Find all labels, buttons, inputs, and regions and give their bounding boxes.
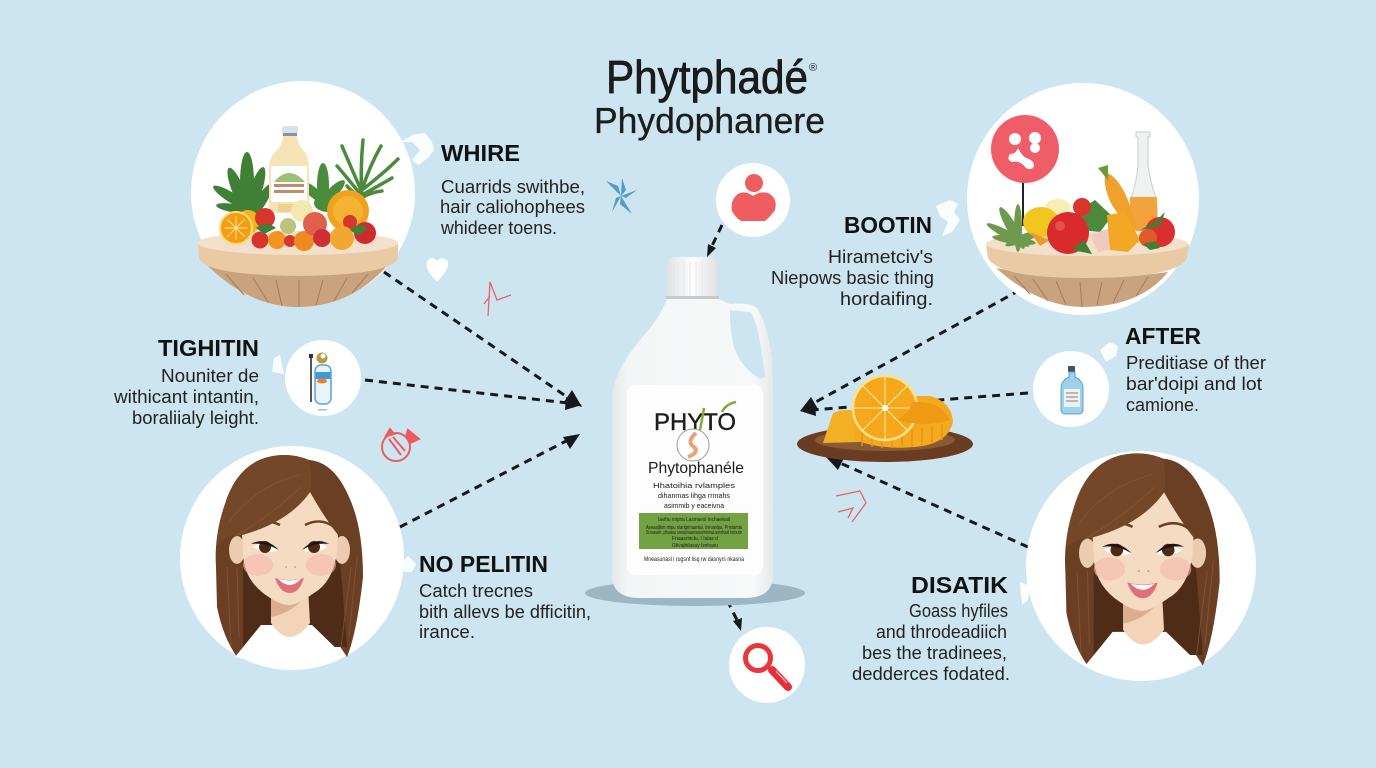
arrow: top-left bowl to bottle xyxy=(384,272,582,407)
text block: TIGHITIN: boraliialy leight. xyxy=(132,407,259,428)
text block: AFTER: Preditiase of ther xyxy=(1126,352,1266,373)
text block: TIGHITIN: Nouniter de xyxy=(161,365,259,386)
text block: BOOTIN: Niepows basic thing xyxy=(771,267,934,288)
text block: DISATIK: Goass hyfiles xyxy=(909,600,1008,621)
panel: left woman xyxy=(180,446,404,670)
bottle label xyxy=(627,385,763,575)
text block: BOOTIN: hordaifing. xyxy=(840,288,933,309)
text block: DISATIK: bes the tradinees, xyxy=(862,642,1007,663)
text block: BOOTIN: BOOTIN xyxy=(844,212,932,238)
text block: WHIRE xyxy=(440,140,585,238)
icon: orange slices on plate xyxy=(797,376,973,462)
panel: top-left food bowl xyxy=(191,81,415,307)
icon: blue pinwheel star xyxy=(606,178,637,214)
label small text xyxy=(653,481,735,510)
icon: red squiggle left xyxy=(484,282,511,316)
icon: carrot xyxy=(1098,165,1137,228)
icon: wooden bowl xyxy=(986,232,1189,307)
text block: DISATIK xyxy=(852,572,1010,684)
text block: WHIRE: whideer toens. xyxy=(440,217,557,238)
text block: DISATIK: DISATIK xyxy=(911,572,1008,598)
arrow: woman to bottle xyxy=(400,434,580,527)
icon: red pomegranate outline xyxy=(382,429,419,461)
text block: WHIRE: WHIRE xyxy=(441,140,520,166)
arrow: bottle to magnifier xyxy=(727,600,742,631)
icon: woman portrait xyxy=(1065,453,1220,673)
text block: NO PELITIN: NO PELITIN xyxy=(419,551,548,577)
panel: small bottle right xyxy=(1033,351,1109,427)
title: Phydophanere xyxy=(594,100,825,141)
text block: BOOTIN: Hirametciv's xyxy=(828,246,933,267)
label small text: asimmib y eaceivna xyxy=(664,501,725,510)
icon: palm plant xyxy=(337,140,398,203)
label small text: Hhatoihia rvlamples xyxy=(653,481,735,490)
bottle shadow xyxy=(585,580,805,606)
text block: TIGHITIN: TIGHITIN xyxy=(158,335,259,361)
label emblem xyxy=(677,429,709,461)
icon: glass bottle xyxy=(1130,132,1157,232)
label green band: Gtivajhilasuy lsnhasu xyxy=(672,543,718,549)
text block: WHIRE: Cuarrids swithbe, xyxy=(441,176,585,197)
arrow: heart icon to bottle xyxy=(707,225,722,257)
icon: person heart xyxy=(732,174,776,221)
text block: TIGHITIN: withicant intantin, xyxy=(113,386,259,407)
icon: red arrows right xyxy=(836,491,866,522)
panel: heart person icon xyxy=(716,163,790,237)
text block: WHIRE: hair caliohophees xyxy=(440,196,585,217)
text block: NO PELITIN: bith allevs be dfficitin, xyxy=(419,601,591,622)
arrow: top-right bowl to centre xyxy=(800,290,1020,411)
label green band: Aseaaljhm mipu nlarlgrinaanlai, Ininswlpa, Pristamla xyxy=(646,525,742,531)
label brand: PHYTO xyxy=(654,409,736,436)
label green band: Iavihu mipna Lasmaesl Inchaeivail xyxy=(658,517,730,523)
icon: water bottle and strap xyxy=(309,352,331,410)
text block: NO PELITIN: Catch trecnes xyxy=(419,580,533,601)
text block: AFTER: AFTER xyxy=(1125,323,1201,349)
title: Phytphadé xyxy=(606,51,808,103)
label green band xyxy=(639,513,748,549)
panel: magnifier icon xyxy=(729,627,805,703)
icon: white heart xyxy=(427,258,448,282)
label small text: dihanmas lihga rrmahs xyxy=(658,491,730,500)
icon: woman portrait xyxy=(216,455,363,664)
label sprout xyxy=(700,402,736,430)
panel: top-right food bowl xyxy=(967,83,1199,315)
icon: oil bottle xyxy=(269,126,309,213)
label name: Phytophanéle xyxy=(648,460,744,477)
text block: AFTER: bar'doipi and lot xyxy=(1126,373,1262,394)
bottle handle opening xyxy=(730,310,765,379)
arrow: small bottle to bottle xyxy=(365,380,582,410)
arrow: after bottle to centre xyxy=(800,393,1028,416)
icon: red pin badge xyxy=(991,115,1059,226)
title: ® xyxy=(809,62,817,74)
text block: TIGHITIN xyxy=(113,335,259,428)
product bottle xyxy=(612,257,773,598)
icon: left herb leaves xyxy=(211,152,275,218)
text block: DISATIK: and throdeadiich xyxy=(876,621,1007,642)
panel: small bottle left xyxy=(285,340,361,416)
text block: NO PELITIN: irance. xyxy=(419,621,475,642)
icon: fruit pile xyxy=(220,190,376,251)
text block: NO PELITIN xyxy=(419,551,591,642)
text block: AFTER: camione. xyxy=(1126,394,1199,415)
icon: centre leaves xyxy=(298,163,348,212)
arrow: right woman to plate xyxy=(826,457,1028,547)
text block: BOOTIN xyxy=(771,212,934,309)
icon: blue bottle xyxy=(1061,366,1083,414)
label green band: Sroseam ,phuasu sioopriasetasiamtimaLasiohasl teloure xyxy=(646,530,742,536)
icon: herb sprig xyxy=(985,204,1044,252)
label footer text: Mneasunasl l rugsnt lisq rw dasnyrs nkasna xyxy=(644,556,744,563)
icon: wooden bowl xyxy=(198,231,398,307)
icon: magnifier xyxy=(746,646,788,687)
title xyxy=(594,51,825,141)
panel: right woman xyxy=(1026,451,1256,681)
label green band: Fnaasmiclu, I Iulas d xyxy=(672,536,718,542)
text block: DISATIK: dedderces fodated. xyxy=(852,663,1010,684)
text block: AFTER xyxy=(1125,323,1266,415)
icon: white splashes xyxy=(272,133,1118,605)
icon: vegetables xyxy=(1023,198,1175,254)
